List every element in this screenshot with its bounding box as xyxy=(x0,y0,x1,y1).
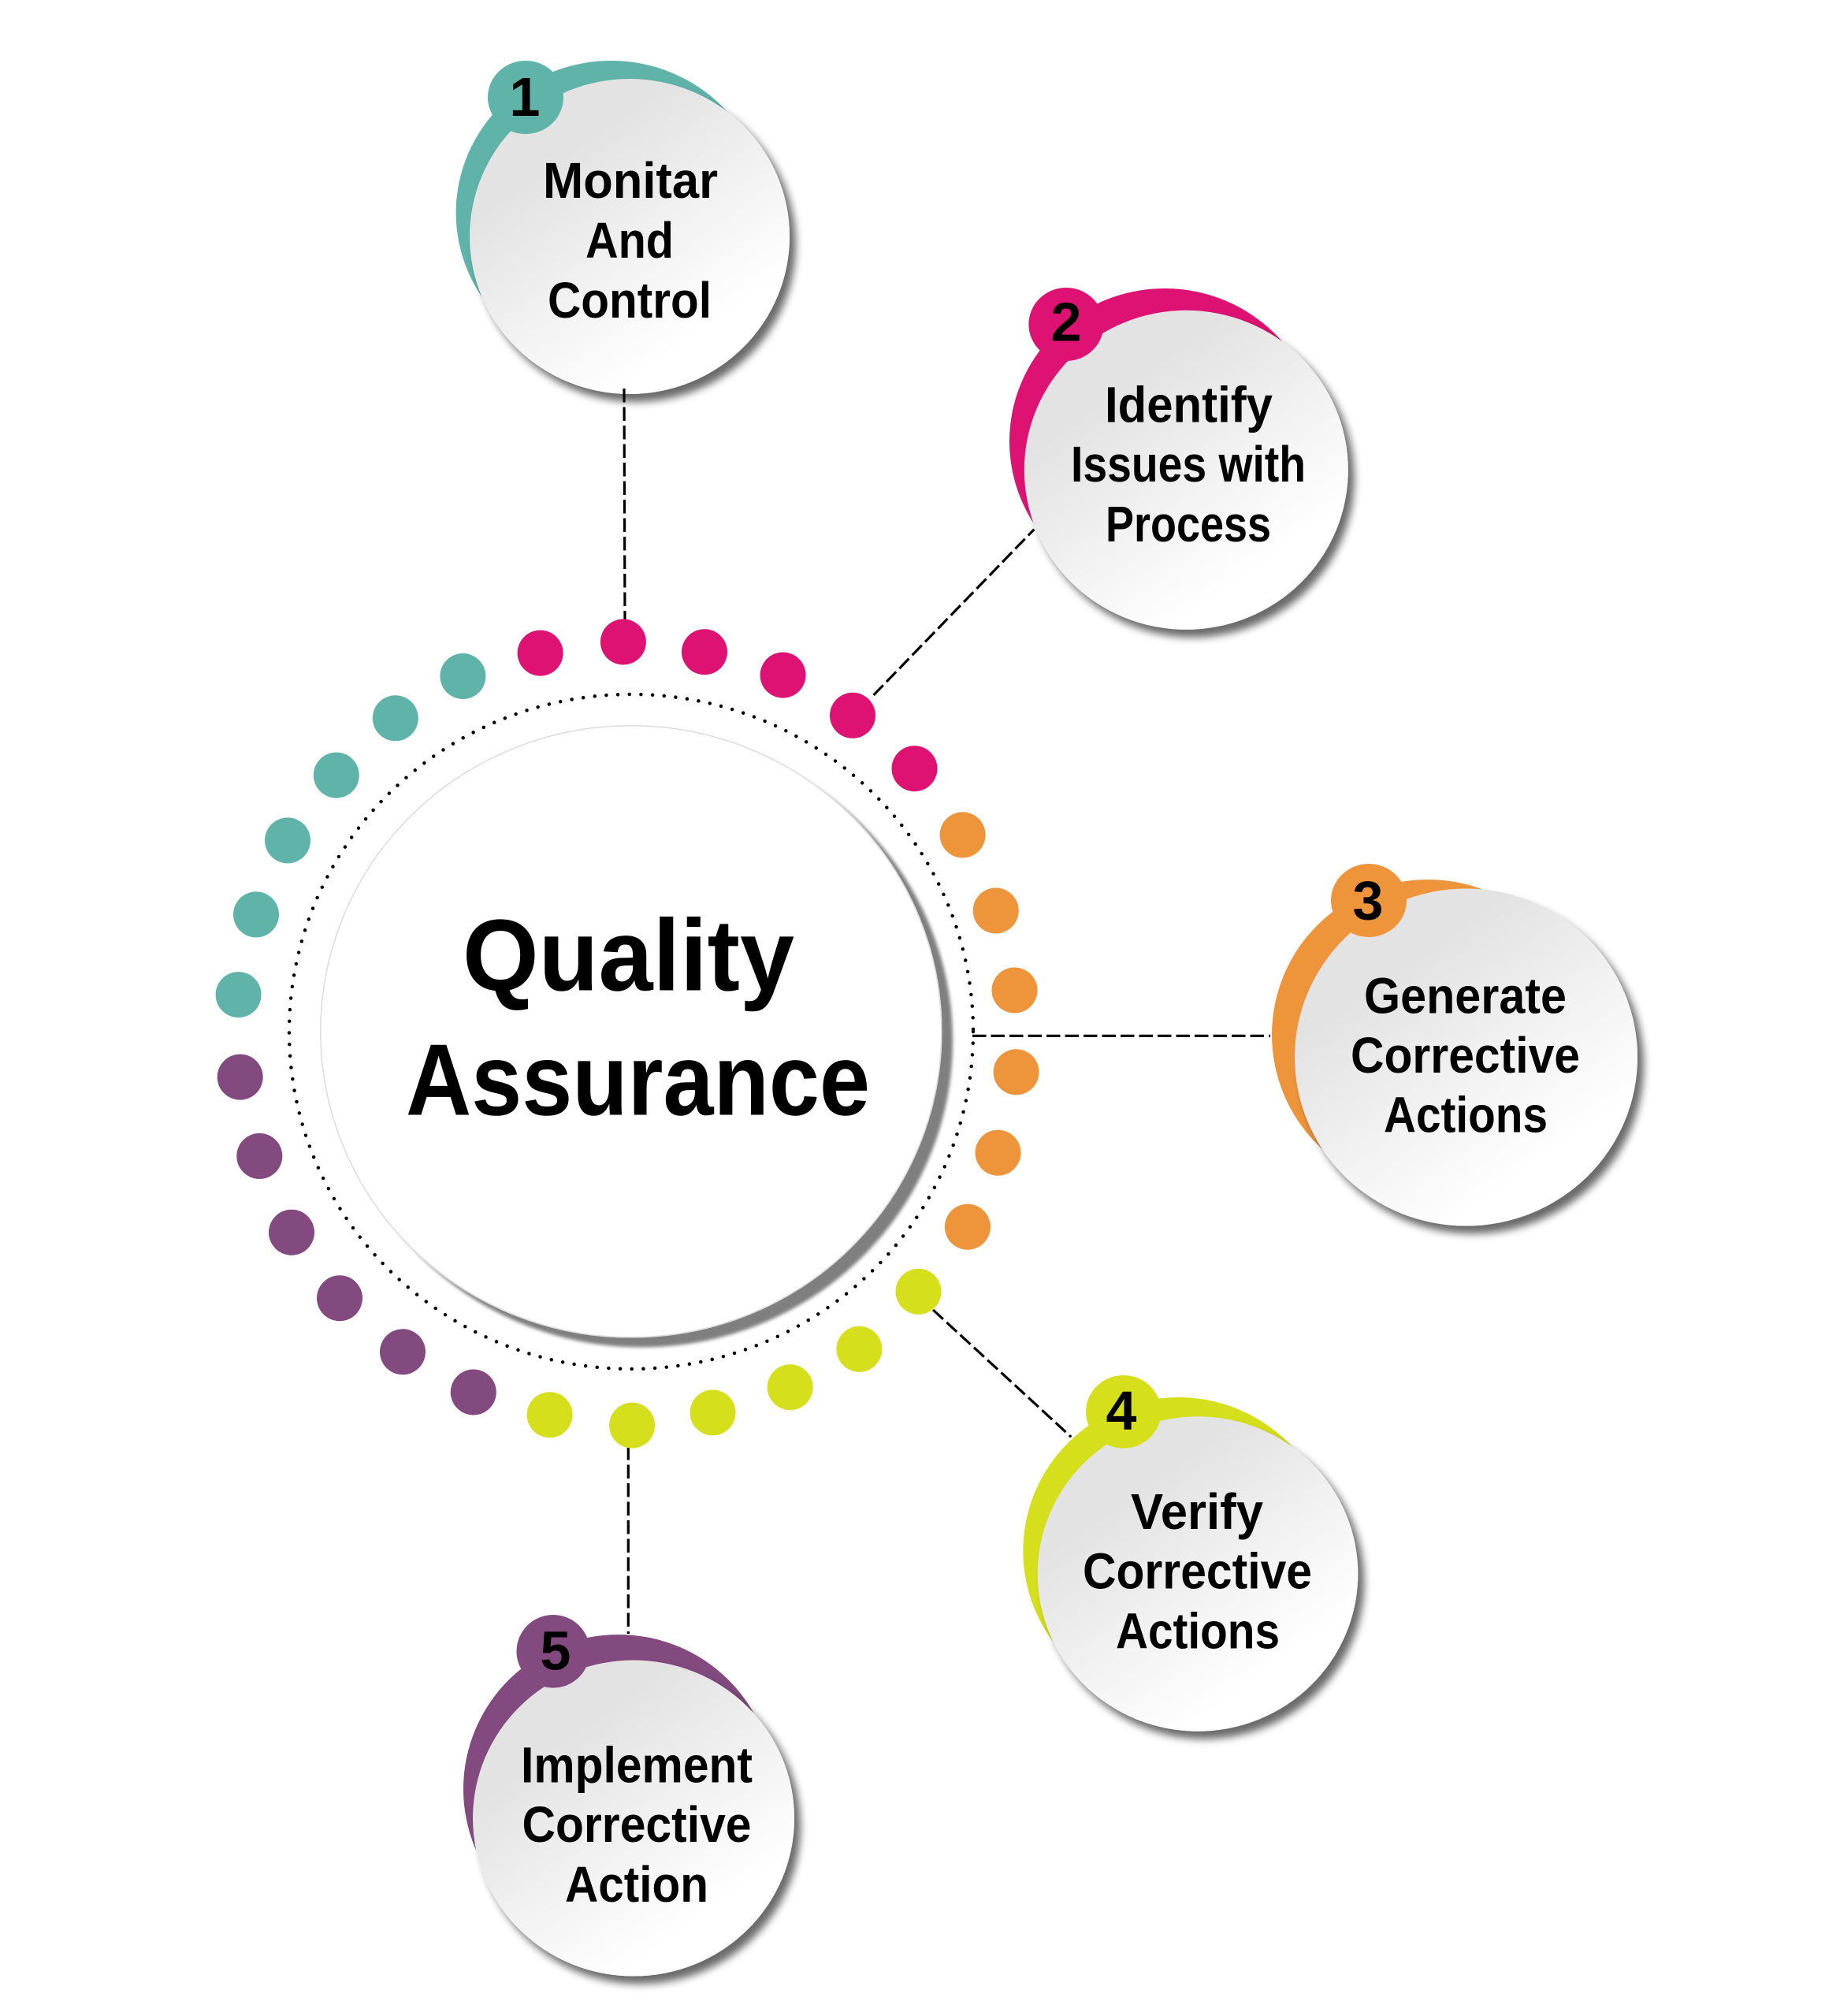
white disc xyxy=(321,726,942,1337)
number badge 4 xyxy=(1086,1375,1161,1449)
connector: step 5 xyxy=(627,1446,630,1634)
number 4: 4 xyxy=(1106,1380,1137,1441)
number badge 1 xyxy=(488,61,563,134)
dot arc: pink xyxy=(518,619,938,791)
label: Generate Corrective Actions: Generate xyxy=(1364,968,1567,1025)
title: Quality Assurance: Quality xyxy=(463,898,794,1012)
label: Implement Corrective Action xyxy=(521,1737,753,1913)
coloured back disc 4 xyxy=(1023,1397,1333,1705)
number badge 3 xyxy=(1331,864,1407,937)
label: Implement Corrective Action: Action xyxy=(565,1856,708,1913)
label: Identify Issues with Process: Process xyxy=(1106,496,1271,552)
panel: step 4 Verify Corrective Actions xyxy=(1023,1375,1358,1731)
dot arc: purple xyxy=(217,1054,496,1415)
panel: step 5 Implement Corrective Action xyxy=(463,1615,794,1977)
grey disc 4 xyxy=(1038,1416,1358,1731)
number badge 2 xyxy=(1028,288,1104,361)
title: Quality Assurance: Assurance xyxy=(406,1023,870,1136)
number 2: 2 xyxy=(1051,292,1081,353)
panel: step 1 Monitar And Control xyxy=(456,61,790,394)
title: Quality Assurance xyxy=(406,898,870,1136)
connector: step 1 xyxy=(624,389,625,623)
connector: step 4 xyxy=(933,1310,1071,1437)
grey disc 2 xyxy=(1024,311,1348,630)
label: Verify Corrective Actions: Actions xyxy=(1116,1603,1280,1660)
panel: step 3 Generate Corrective Actions xyxy=(1272,864,1637,1226)
label: Verify Corrective Actions: Verify xyxy=(1131,1483,1263,1540)
label: Identify Issues with Process xyxy=(1071,377,1306,552)
label: Verify Corrective Actions: Corrective xyxy=(1083,1543,1312,1600)
grey disc 3 xyxy=(1295,889,1637,1226)
label: Monitar And Control: Control xyxy=(548,272,712,329)
connector: step 2 xyxy=(874,530,1034,695)
label: Verify Corrective Actions xyxy=(1083,1483,1312,1660)
coloured back disc 2 xyxy=(1009,288,1320,594)
dotted ring xyxy=(289,694,973,1369)
label: Monitar And Control: And xyxy=(585,212,674,269)
central circle xyxy=(321,726,942,1337)
dot arc: yellow xyxy=(527,1269,941,1449)
coloured back disc 3 xyxy=(1272,880,1584,1190)
label: Identify Issues with Process: Identify xyxy=(1105,377,1273,433)
number 5: 5 xyxy=(541,1620,571,1682)
number 3: 3 xyxy=(1353,870,1383,932)
label: Implement Corrective Action: Implement xyxy=(521,1737,753,1794)
panel: step 2 Identify Issues with Process xyxy=(1009,288,1348,630)
label: Generate Corrective Actions xyxy=(1351,968,1580,1143)
label: Monitar And Control: Monitar xyxy=(543,152,718,209)
label: Identify Issues with Process: Issues with xyxy=(1071,436,1306,493)
label: Generate Corrective Actions: Actions xyxy=(1384,1086,1548,1143)
connector dashed lines xyxy=(624,389,1270,1634)
number 1: 1 xyxy=(510,66,540,128)
number badge 5 xyxy=(517,1615,589,1688)
dot arc: orange xyxy=(940,812,1039,1250)
dot arc: teal xyxy=(216,653,485,1017)
label: Monitar And Control xyxy=(543,152,718,329)
grey disc 5 xyxy=(473,1660,794,1977)
coloured back disc 1 xyxy=(456,61,767,365)
label: Implement Corrective Action: Corrective xyxy=(522,1796,752,1853)
connector: step 3 xyxy=(972,1035,1270,1037)
label: Generate Corrective Actions: Corrective xyxy=(1351,1027,1580,1084)
grey disc 1 xyxy=(470,79,790,394)
coloured back disc 5 xyxy=(463,1635,774,1943)
